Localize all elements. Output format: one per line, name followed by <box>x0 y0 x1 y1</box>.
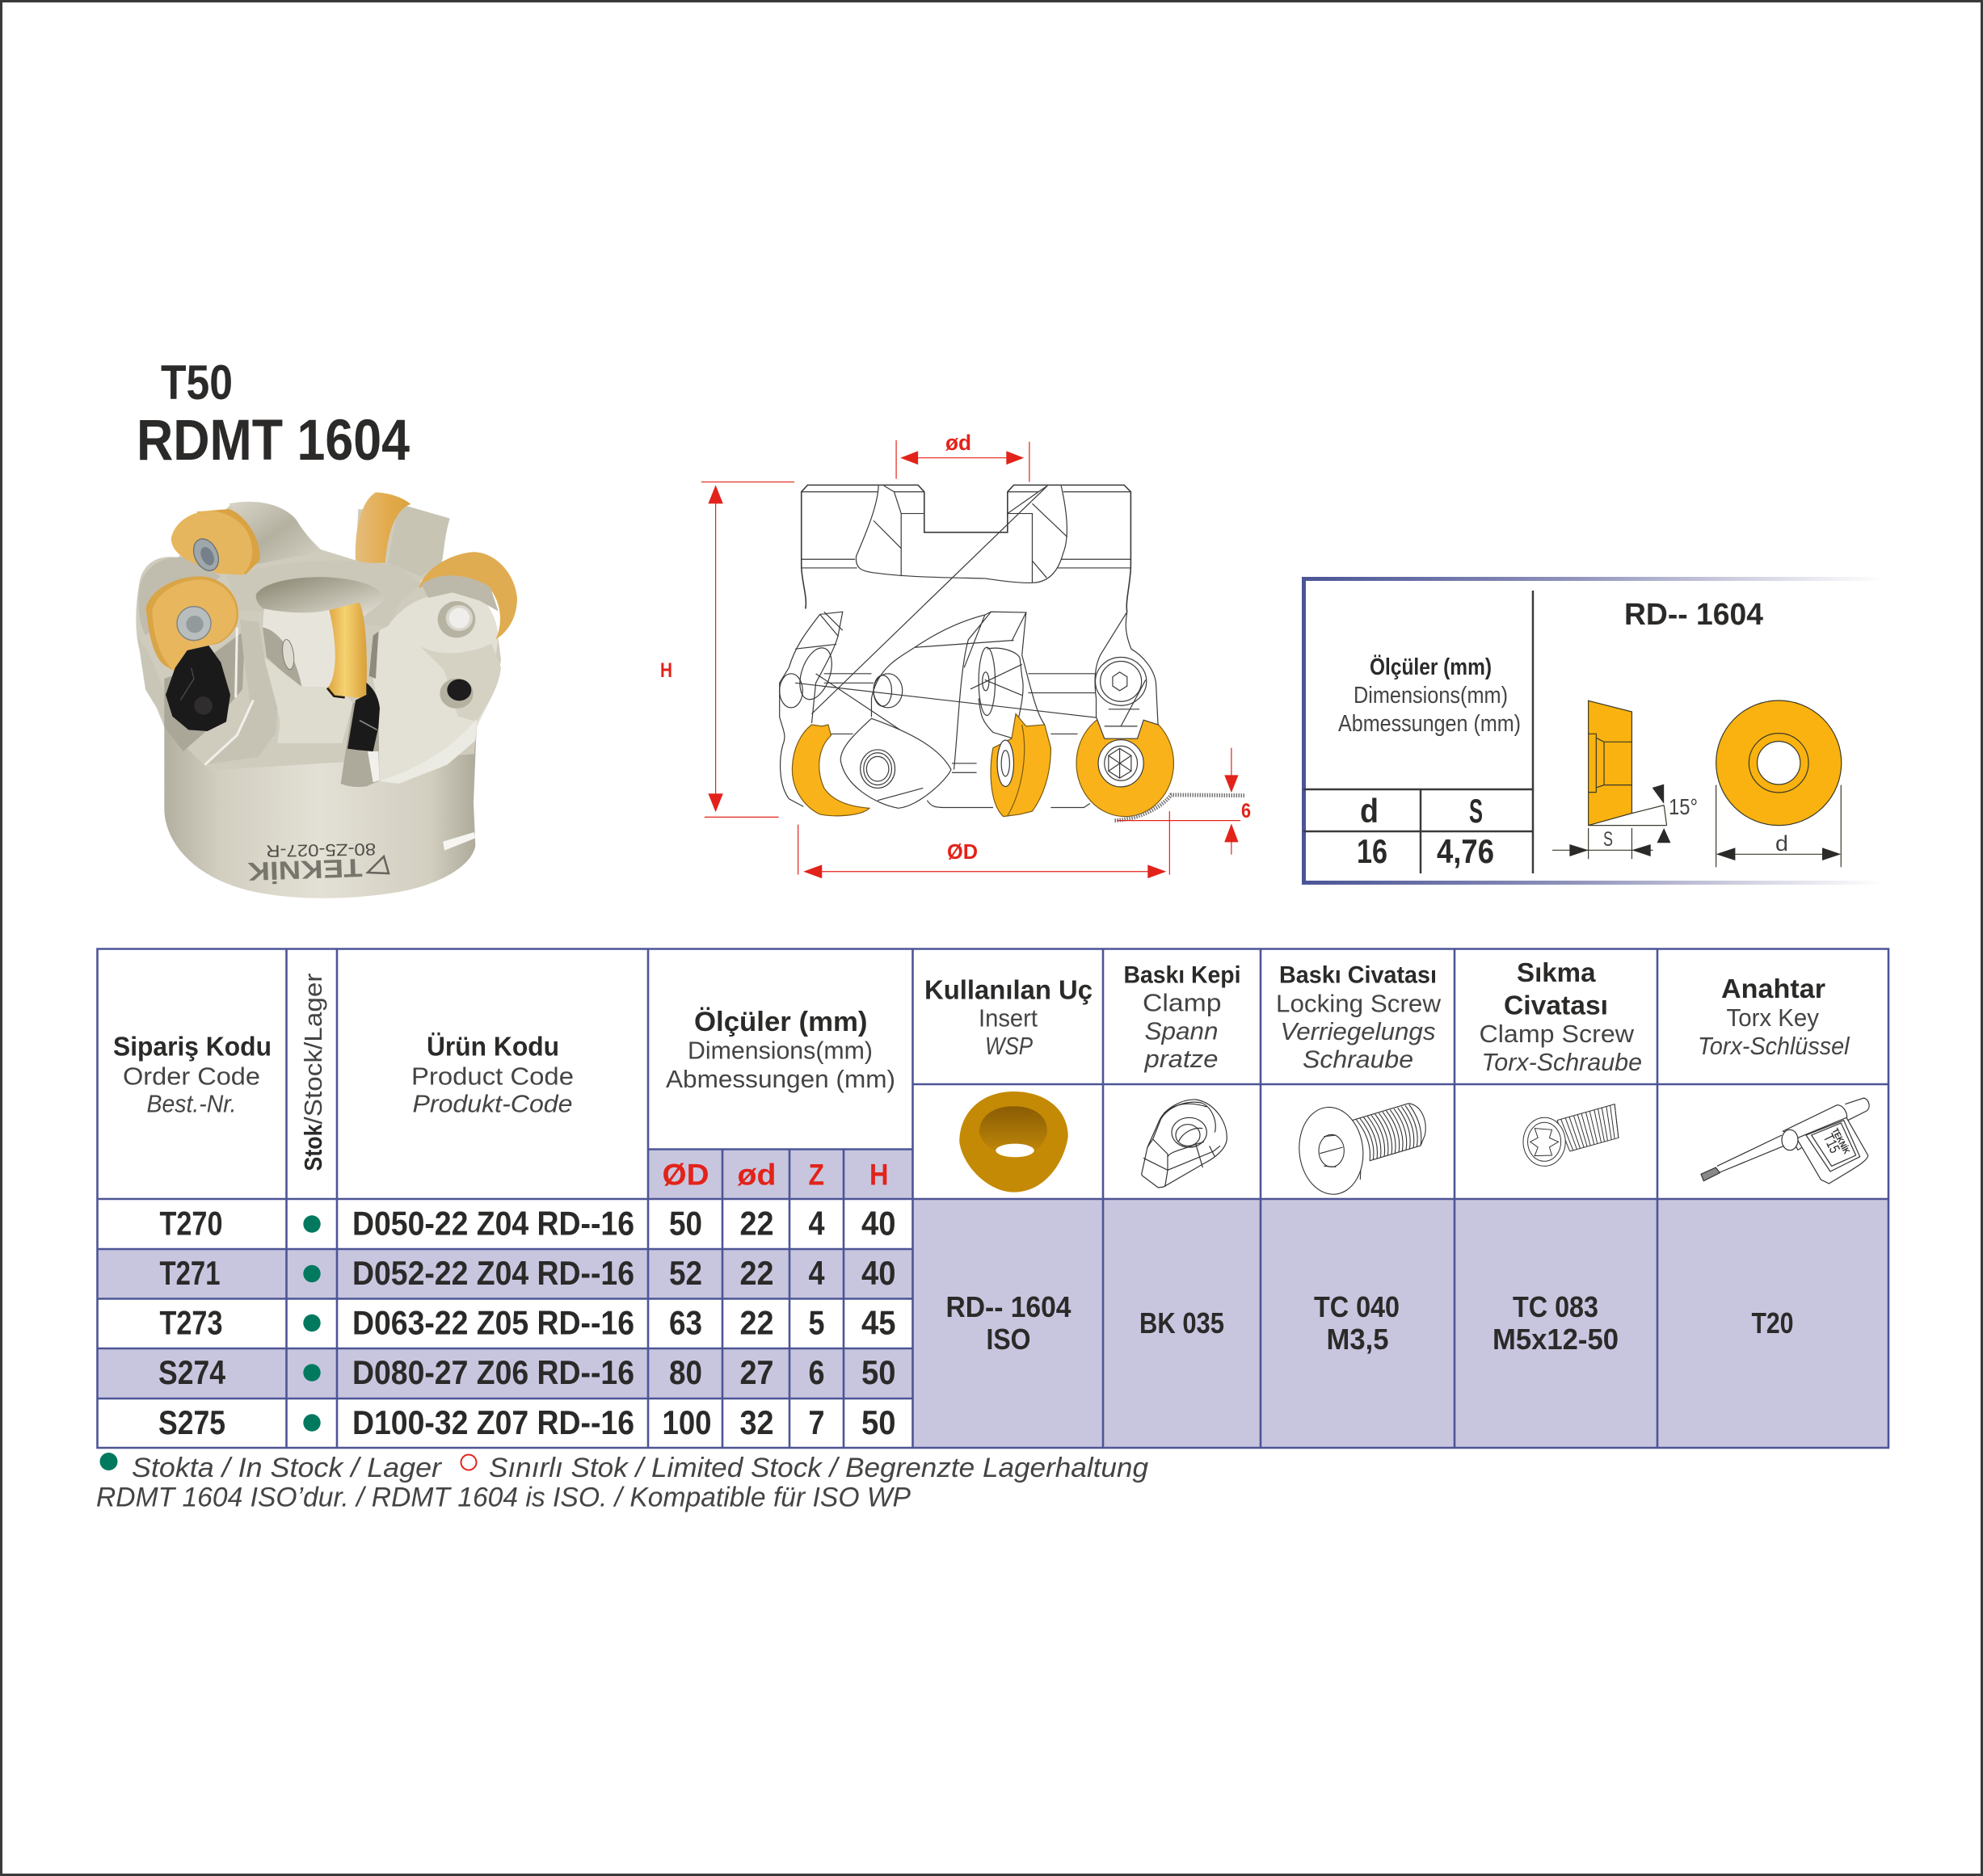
merged cell: clamp screw code <box>1493 1290 1619 1356</box>
insert dimension labels: 15° <box>1669 794 1698 819</box>
row: S274: 50 <box>861 1353 895 1391</box>
header: locking screw: Baskı Civatası <box>1279 961 1437 989</box>
row: S275 <box>158 1403 895 1441</box>
row: S275: D100-32 Z07 RD--16 <box>352 1403 634 1441</box>
icon: clamp <box>1142 1100 1227 1188</box>
dimensions caption: Abmessungen (mm) <box>1338 711 1521 737</box>
header: insert: Kullanılan Uç <box>924 974 1093 1005</box>
dimension labels: 6 <box>1241 800 1251 822</box>
header: stock: Stok <box>299 1124 327 1171</box>
header: dimensions: Dimensions(mm) <box>688 1036 873 1065</box>
row: S275: 100 <box>663 1403 711 1441</box>
row: T273: 45 <box>861 1304 895 1341</box>
row: T271: T271 <box>160 1254 220 1292</box>
header: clamp screw: Torx-Schraube <box>1482 1048 1642 1076</box>
dimension column heads: Z <box>808 1159 824 1191</box>
insert values: S <box>1469 792 1483 830</box>
row: T270: 22 <box>740 1204 774 1243</box>
side screws <box>438 601 475 637</box>
row: T273: 63 <box>669 1304 702 1341</box>
header: clamp: Baskı Kepi <box>1123 961 1241 989</box>
icon: limited stock ring <box>461 1454 477 1470</box>
header: clamp: Spann <box>1144 1016 1219 1045</box>
row: T270 <box>160 1204 895 1243</box>
header: locking screw: Locking Screw <box>1276 989 1442 1018</box>
product photo: milling cutter <box>136 492 517 898</box>
merged cell: insert code: RD-- 1604 <box>945 1290 1071 1323</box>
dimension column heads: ØD <box>663 1159 709 1191</box>
merged cell: locking screw code <box>1314 1290 1400 1356</box>
centre pocket <box>341 703 379 787</box>
panel frame <box>1302 577 1884 885</box>
front centre block <box>263 608 339 687</box>
row: T273: D063-22 Z05 RD--16 <box>352 1304 634 1341</box>
header: dimensions: Abmessungen (mm) <box>666 1065 895 1093</box>
insert: centre <box>327 603 367 698</box>
title: T50 <box>161 355 233 410</box>
engraved markings: TEKNİK <box>247 853 363 886</box>
header: stock: /Stock/Lager <box>299 973 327 1125</box>
header: clamp: pratze <box>1143 1045 1219 1073</box>
row: T271: 52 <box>669 1254 702 1292</box>
lower body <box>164 721 477 898</box>
insert dimension labels: d <box>1775 831 1788 856</box>
insert values: 4,76 <box>1437 832 1494 870</box>
right wing <box>373 592 501 781</box>
compatibility note: RDMT 1604 ISO’dur. / RDMT 1604 is ISO. / Kompatible für ISO WP <box>96 1482 911 1512</box>
inserts <box>792 725 869 816</box>
merged cell: locking screw code: TC 040 <box>1314 1290 1400 1323</box>
insert dimension labels <box>1603 794 1788 856</box>
merged cell: clamp screw code: TC 083 <box>1513 1290 1598 1323</box>
header: order code <box>113 1031 272 1118</box>
header: torx key: Torx Key <box>1726 1003 1819 1032</box>
header: product code: Ürün Kodu <box>427 1031 559 1062</box>
dimension column heads: ød <box>737 1159 776 1191</box>
panel: insert dimensions <box>1302 577 1884 885</box>
header: torx key: Anahtar <box>1721 974 1825 1003</box>
insert values: d <box>1360 792 1379 830</box>
row: S274: D080-27 Z06 RD--16 <box>352 1353 634 1391</box>
row: T273: T273 <box>160 1304 223 1341</box>
dimension labels: ØD <box>947 839 978 864</box>
row: T270: D050-22 Z04 RD--16 <box>352 1204 634 1243</box>
icon: in stock dot <box>100 1453 118 1470</box>
icon: clamp screw <box>1523 1104 1619 1166</box>
header: locking screw: Schraube <box>1303 1045 1413 1073</box>
header: product code <box>411 1031 574 1118</box>
row: S275: S275 <box>158 1403 225 1441</box>
row: S275: 50 <box>861 1403 895 1441</box>
row: T270: 50 <box>669 1204 702 1243</box>
table fills and grid <box>97 949 1888 1448</box>
header: insert: WSP <box>985 1032 1033 1060</box>
row: T270: T270 <box>160 1204 223 1243</box>
chip line <box>1114 795 1244 821</box>
row: S275: 32 <box>740 1403 774 1441</box>
row: T273: 5 <box>808 1304 824 1341</box>
title <box>137 355 410 473</box>
header: clamp screw <box>1479 957 1642 1076</box>
header: torx key <box>1698 974 1850 1060</box>
insert heading: RD-- 1604 <box>1624 598 1763 632</box>
dimension column heads: H <box>869 1159 889 1191</box>
merged cell: torx key code: T20 <box>1752 1306 1794 1340</box>
header: clamp: Clamp <box>1143 989 1222 1016</box>
limited stock text: Sınırlı Stok / Limited Stock / Begrenzte Lagerhaltung <box>489 1453 1148 1483</box>
row: S275: 7 <box>808 1403 824 1441</box>
header: clamp screw: Clamp Screw <box>1479 1020 1635 1048</box>
body outline <box>802 485 1130 612</box>
header: dimensions: Ölçüler (mm) <box>694 1007 868 1037</box>
merged cell: clamp code: BK 035 <box>1139 1306 1224 1340</box>
row: S274: 6 <box>808 1353 824 1391</box>
upper mass <box>136 503 501 770</box>
icon: locking screw <box>1295 1104 1425 1197</box>
row: S274: 80 <box>669 1353 702 1391</box>
title: RDMT 1604 <box>137 409 410 473</box>
dimension labels: H <box>660 659 672 682</box>
technical drawing of cutter <box>660 431 1251 878</box>
row: T271: 40 <box>861 1254 895 1292</box>
engraved markings <box>247 839 389 886</box>
row: T273: 22 <box>740 1304 774 1341</box>
table <box>97 949 1888 1448</box>
bore <box>256 577 384 616</box>
header: clamp <box>1123 961 1241 1073</box>
dimensions caption: Dimensions(mm) <box>1354 683 1508 709</box>
header: product code: Product Code <box>411 1062 574 1091</box>
row: T271 <box>160 1254 895 1292</box>
header: order code: Order Code <box>123 1062 260 1091</box>
header: order code: Best.-Nr. <box>147 1089 236 1118</box>
header: clamp screw: Sıkma <box>1517 957 1596 987</box>
header: dimensions <box>666 1007 895 1093</box>
merged cell: insert code: ISO <box>986 1323 1031 1356</box>
legend <box>96 1453 1148 1512</box>
icon: torx key: TEKNİK <box>1829 1126 1852 1155</box>
pocket behind clamp <box>164 630 245 751</box>
insert values: 16 <box>1357 832 1387 870</box>
insert: back right <box>356 492 410 563</box>
merged cell: clamp screw code: M5x12-50 <box>1493 1323 1619 1356</box>
insert side view <box>1552 700 1670 859</box>
centre clamp <box>979 647 996 715</box>
row: S274 <box>158 1353 895 1391</box>
red dimension lines <box>660 431 1251 878</box>
row: S274: S274 <box>158 1353 226 1391</box>
lower lobe with screw <box>840 718 951 808</box>
merged cell: locking screw code: M3,5 <box>1327 1323 1388 1356</box>
row: T271: 22 <box>740 1254 774 1292</box>
header: clamp screw: Civatası <box>1504 991 1608 1020</box>
row: T271: D052-22 Z04 RD--16 <box>352 1254 634 1292</box>
insert: back left <box>196 509 260 575</box>
row: T271: 4 <box>808 1254 825 1292</box>
insert: front left <box>146 576 238 671</box>
insert front view <box>1716 700 1842 867</box>
row: T273 <box>160 1304 895 1341</box>
top face <box>226 561 422 628</box>
header: insert: Insert <box>979 1003 1038 1033</box>
black clamps <box>166 646 230 731</box>
insert values <box>1357 792 1494 870</box>
header: locking screw <box>1276 961 1442 1073</box>
in stock text: Stokta / In Stock / Lager <box>132 1453 443 1483</box>
row: S274: 27 <box>740 1353 774 1391</box>
dimension column heads <box>663 1159 889 1191</box>
dimensions caption <box>1338 654 1521 737</box>
row: T270: 4 <box>808 1204 825 1243</box>
dimensions caption: Ölçüler (mm) <box>1370 654 1492 680</box>
icon: torx key: T15 <box>1820 1131 1843 1155</box>
row: T270: 40 <box>861 1204 895 1243</box>
icon: torx key <box>1701 1098 1869 1184</box>
insert: right <box>419 552 517 640</box>
header: locking screw: Verriegelungs <box>1280 1017 1435 1045</box>
engraved markings: 80-Z5-027-R <box>266 839 376 860</box>
header: product code: Produkt-Code <box>412 1089 572 1118</box>
dimension labels <box>660 431 1251 864</box>
right clamp <box>1095 612 1158 738</box>
insert dimension labels: S <box>1603 828 1613 851</box>
header: insert <box>924 974 1093 1060</box>
icon: insert <box>959 1092 1068 1192</box>
dimension labels: ød <box>945 431 971 455</box>
header: torx key: Torx-Schlüssel <box>1698 1032 1850 1060</box>
header: order code: Sipariş Kodu <box>113 1031 272 1062</box>
merged cell: insert code <box>945 1290 1071 1356</box>
